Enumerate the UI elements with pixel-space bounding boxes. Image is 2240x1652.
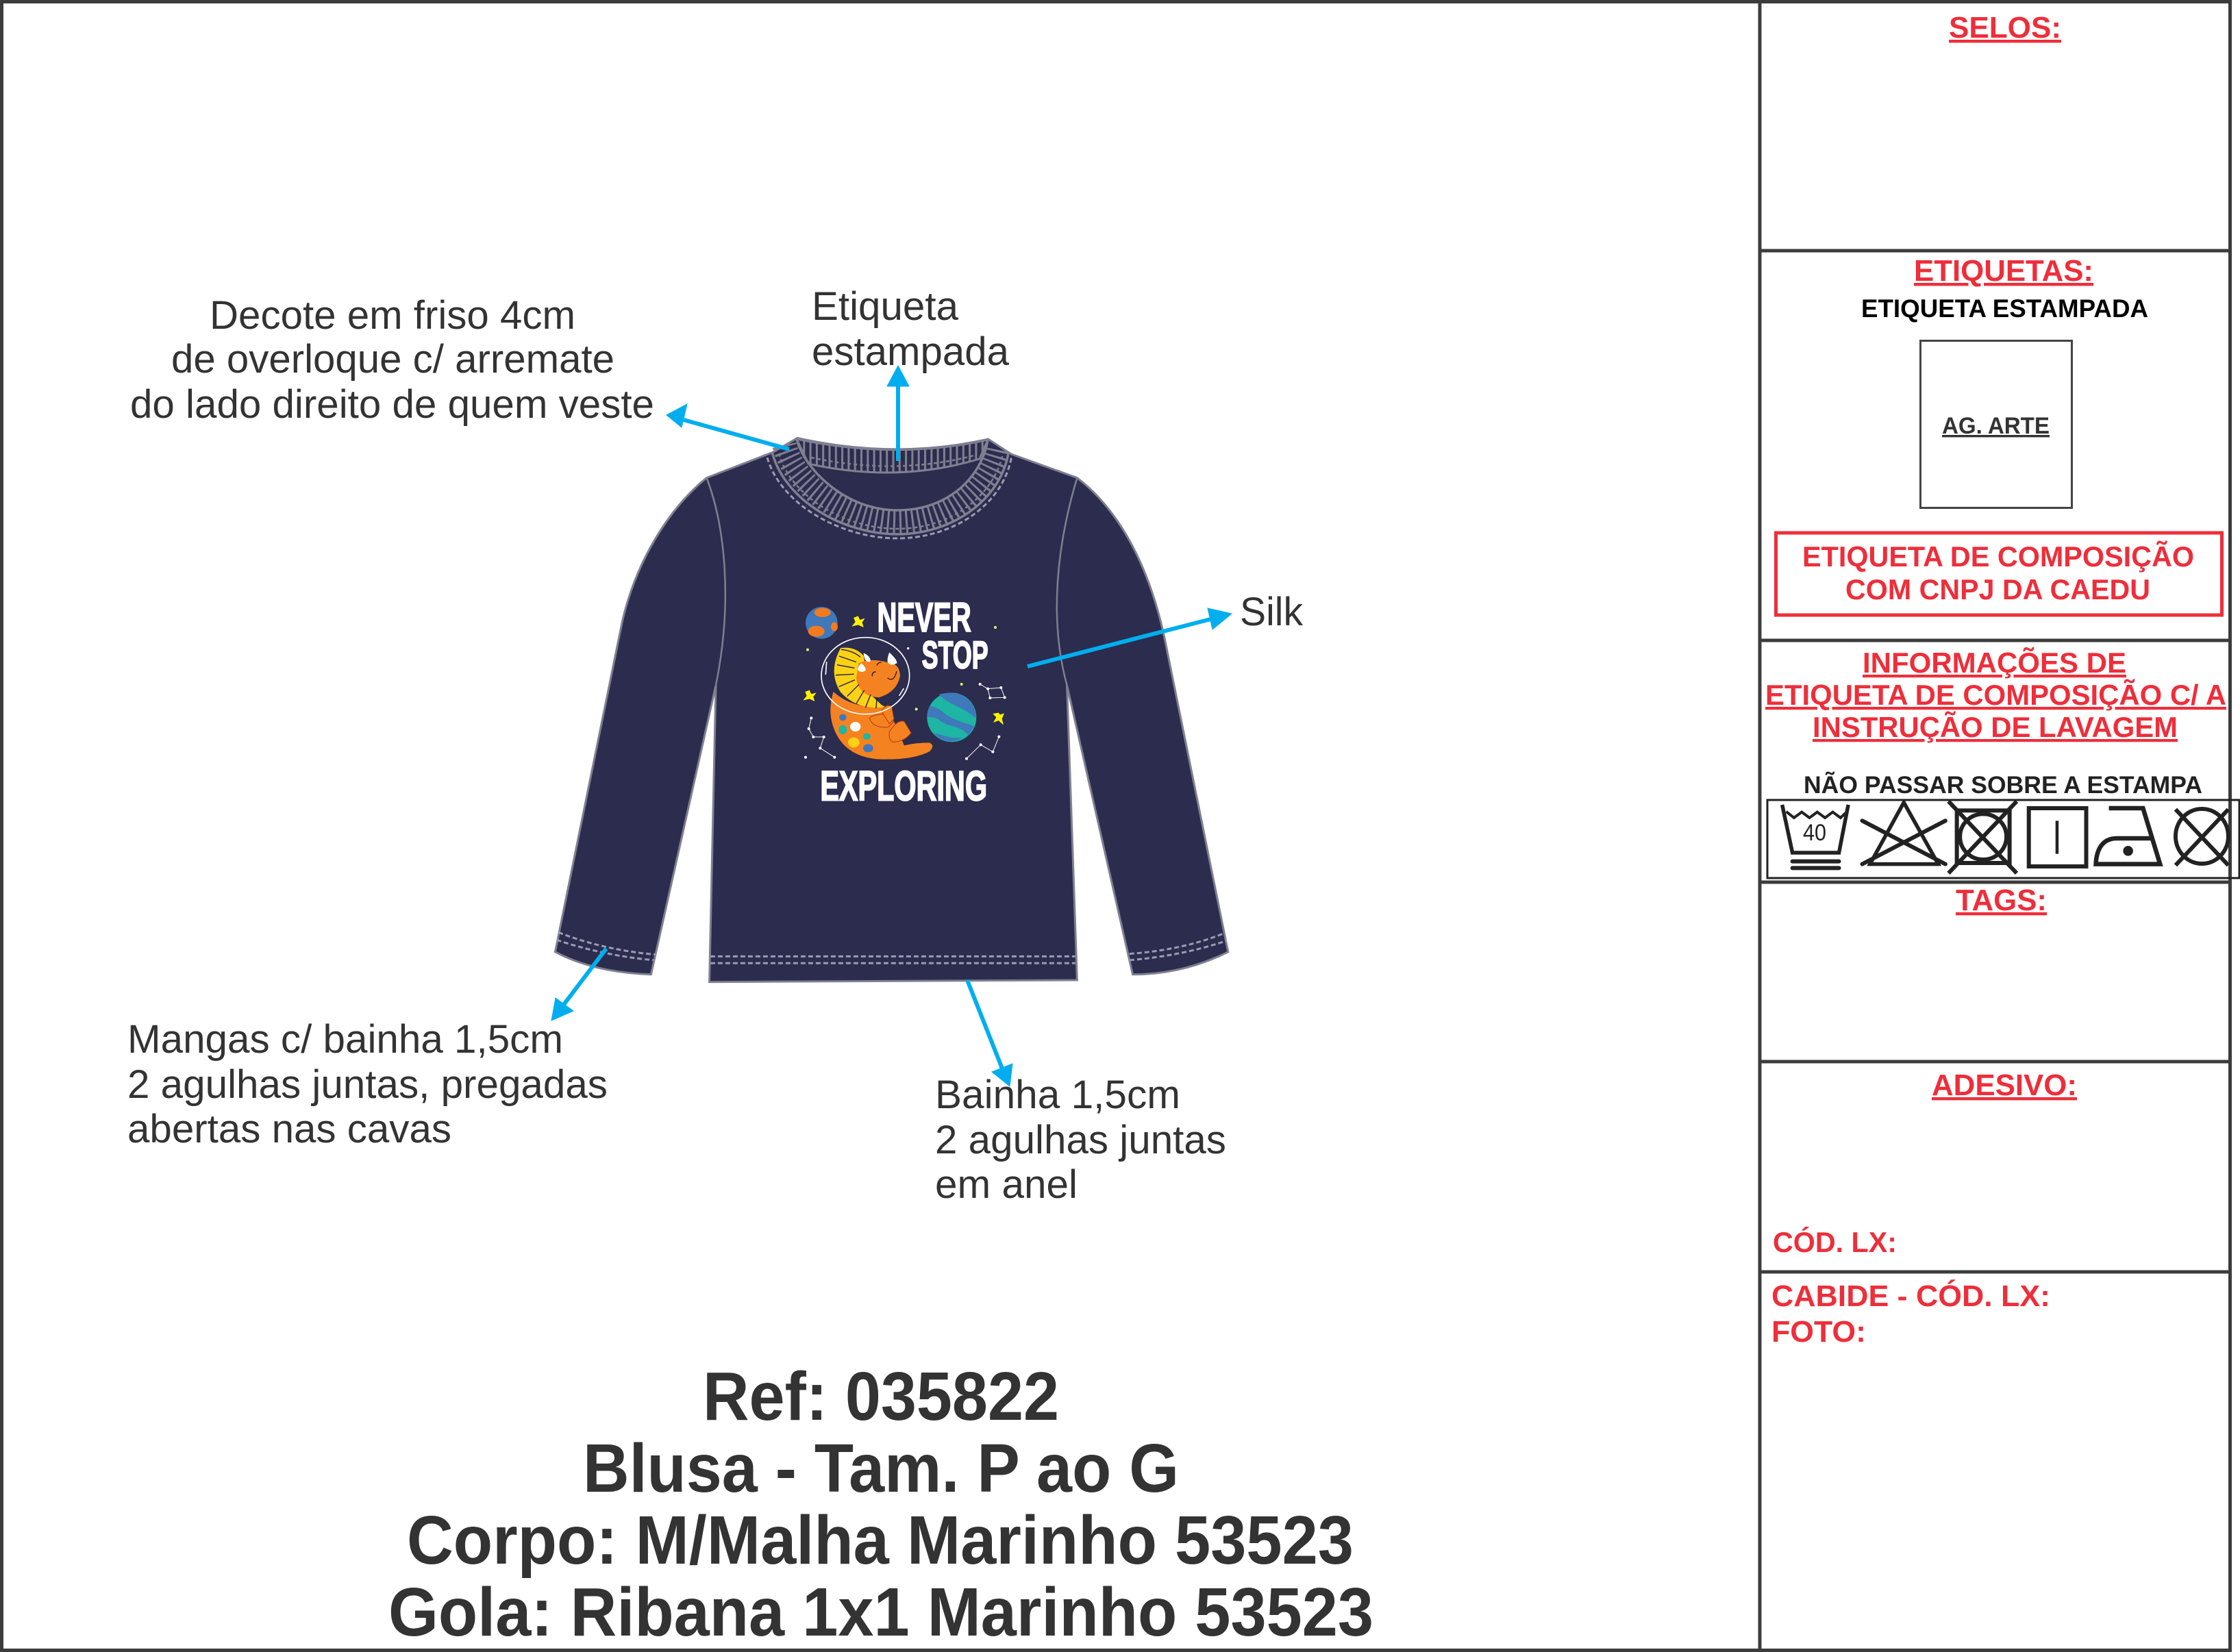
print text: NEVER: [878, 595, 971, 640]
callout: hem: Bainha 1,5cm: [935, 1073, 1180, 1117]
callout: printed label: [812, 284, 1010, 374]
callout: composition label: [1776, 533, 2222, 615]
panel: adesivo: ADESIVO:: [1932, 1068, 2077, 1102]
icon: do not dry clean: [2176, 809, 2228, 865]
panel: etiquetas: [1776, 254, 2222, 615]
heading: composition information: [1765, 646, 2226, 743]
callout: printed label: estampada: [812, 329, 1010, 374]
icon: striped planet: [927, 692, 976, 742]
panel: selos: SELOS:: [1949, 11, 2061, 45]
callout: composition label: ETIQUETA DE COMPOSIÇÃO: [1802, 540, 2194, 573]
icon: constellations: [809, 684, 1005, 759]
callout: printed label: Etiqueta: [812, 284, 959, 329]
panel: tags: TAGS:: [1956, 884, 2047, 917]
print text: STOP: [922, 634, 988, 677]
icon: small orange and blue planet: [806, 607, 838, 639]
illustration: Never Stop Exploring print: [803, 595, 1006, 810]
text: do not iron on print: NÃO PASSAR SOBRE A ESTAMPA: [1804, 772, 2202, 799]
product specification title: Blusa - Tam. P ao G: [583, 1430, 1179, 1507]
icon: iron low: [2096, 808, 2160, 864]
callout: neckline: do lado direito de quem veste: [130, 382, 654, 427]
callout: composition label: COM CNPJ DA CAEDU: [1845, 573, 2150, 605]
icon: constellation dots: [804, 626, 1006, 760]
callout: silk: Silk: [1240, 590, 1304, 634]
label placeholder box: AG. ARTE: [1942, 413, 2050, 439]
panel: cabide: FOTO:: [1771, 1315, 1866, 1349]
text: etiqueta estampada: ETIQUETA ESTAMPADA: [1861, 295, 2148, 323]
callout: hem: em anel: [935, 1162, 1078, 1207]
panel: cabide: CABIDE - CÓD. LX:: [1771, 1279, 2050, 1313]
product specification title: [388, 1358, 1373, 1651]
arrow: printed label: [887, 366, 909, 461]
product specification title: Ref: 035822: [703, 1358, 1059, 1435]
callout: neckline: de overloque c/ arremate: [171, 337, 614, 381]
heading: composition information: INSTRUÇÃO DE LAVAGEM: [1813, 711, 2178, 743]
panel: adesivo: [1773, 1068, 2077, 1258]
arrow: neckline: [667, 404, 789, 449]
arrow: silk: [1028, 608, 1232, 666]
icon: do not tumble dry: [1948, 801, 2017, 873]
callout: neckline: Decote em friso 4cm: [210, 293, 575, 338]
icon: line dry: [2029, 808, 2087, 866]
callout: sleeves: Mangas c/ bainha 1,5cm: [127, 1017, 563, 1062]
heading: composition information: ETIQUETA DE COMPOSIÇÃO C/ A: [1765, 679, 2226, 711]
print text: [820, 595, 988, 810]
product specification title: Corpo: M/Malha Marinho 53523: [407, 1502, 1354, 1579]
heading: composition information: INFORMAÇÕES DE: [1863, 646, 2126, 679]
callout: sleeves: 2 agulhas juntas, pregadas: [127, 1062, 608, 1107]
collar: ribbed band: [767, 439, 1012, 538]
arrow: hem: [967, 980, 1012, 1086]
panel: adesivo: CÓD. LX:: [1773, 1225, 1897, 1258]
panel: washing instructions: [1765, 646, 2239, 878]
callout: sleeves: [127, 1017, 608, 1151]
care symbols box: [1767, 800, 2239, 878]
callout: hem: [935, 1073, 1226, 1207]
panel: cabide: [1771, 1279, 2050, 1349]
icon: wash at 40: 40: [1803, 820, 1826, 846]
heading: etiquetas: ETIQUETAS:: [1914, 254, 2093, 288]
arrow: sleeves: [551, 949, 606, 1021]
panel: garment technical drawing: [127, 284, 1373, 1651]
callout: neckline: [130, 293, 654, 427]
icon: wash at 40: [1782, 805, 1848, 868]
callout: hem: 2 agulhas juntas: [935, 1118, 1226, 1162]
callout: sleeves: abertas nas cavas: [127, 1107, 451, 1151]
product specification title: Gola: Ribana 1x1 Marinho 53523: [388, 1574, 1373, 1651]
illustration: navy long sleeve shirt: [555, 438, 1228, 982]
icon: do not bleach: [1863, 803, 1945, 864]
illustration: dinosaur astronaut: [821, 638, 932, 760]
label placeholder box: [1921, 341, 2071, 508]
icon: stars: [803, 616, 1004, 725]
print text: EXPLORING: [820, 762, 987, 810]
